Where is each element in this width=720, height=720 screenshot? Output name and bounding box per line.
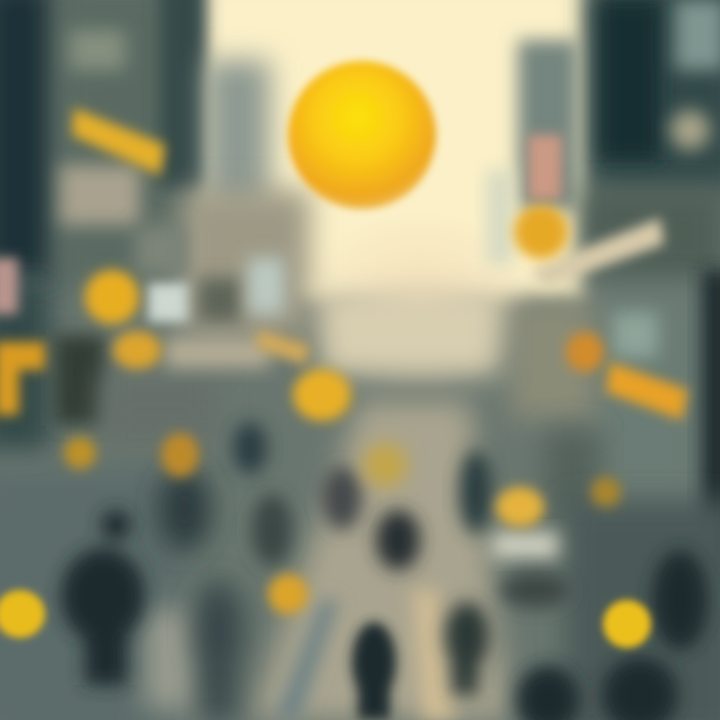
light: bottom left [0,590,45,638]
person: left mid [159,468,211,552]
buildings: right [487,0,720,570]
person: mid street [376,510,420,570]
buildings: left [0,0,310,450]
sign: centre small [256,330,310,365]
person: distant centre [322,466,362,530]
light: centre right [496,487,544,527]
person: mid street left [252,494,292,566]
person: right mid dark [500,572,570,608]
light: lower centre [268,574,308,614]
light: bottom right [603,600,651,648]
light: left street [64,437,96,469]
person: bottom right group [516,550,708,720]
sign: upper left [72,108,165,175]
light: left inner [161,433,199,477]
person: lower centre left [192,580,244,720]
sign: centre [293,369,351,421]
light: centre street [363,443,407,487]
light: right street [591,477,621,507]
sign: far left [0,342,45,415]
sign: right [606,362,688,420]
sun [288,61,436,209]
person: lower right of centre [445,602,489,695]
light: right small [566,332,604,372]
crowd of silhouettes [61,422,708,720]
light: top right [514,205,568,259]
light: left [85,270,139,324]
person: mid right [459,450,493,534]
light: left low [113,331,161,369]
yellow signs and lights [0,108,688,648]
street [0,290,720,720]
person: lower centre [352,622,396,720]
sky [200,0,585,390]
person: distant left [233,422,267,474]
person: foreground left [61,510,145,685]
